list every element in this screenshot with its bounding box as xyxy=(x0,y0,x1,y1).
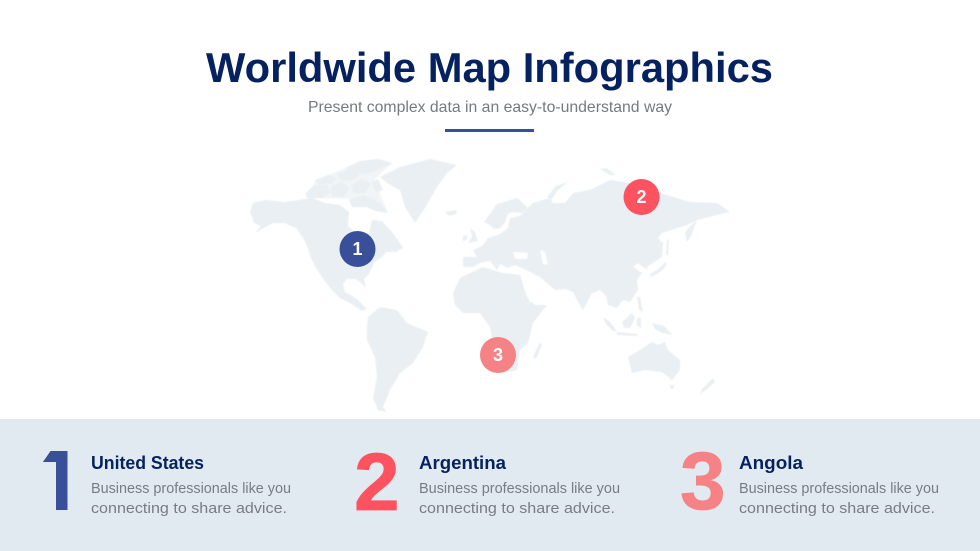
description xyxy=(739,480,939,517)
item 1: United States xyxy=(43,451,290,516)
heading: Angola: Angola xyxy=(739,453,804,473)
marker 1: United States xyxy=(340,231,376,267)
map: UK and Ireland xyxy=(468,228,478,243)
map: inland seas xyxy=(513,250,548,265)
map: Novaya Zemlya xyxy=(547,182,568,199)
description: Business professionals like you xyxy=(739,480,939,497)
description: connecting to share advice. xyxy=(739,500,935,517)
map: Australia xyxy=(628,342,680,380)
map: Red Sea xyxy=(521,277,533,303)
map: Arctic Russian islands xyxy=(600,168,616,175)
map: North America xyxy=(250,198,403,311)
marker 3: Angola xyxy=(480,337,516,373)
world map xyxy=(250,159,730,412)
subtitle: Present complex data in an easy-to-understand way xyxy=(308,99,672,116)
map: Scandinavia xyxy=(484,198,528,229)
title underline accent xyxy=(445,129,534,132)
map: Africa xyxy=(453,267,547,373)
map: Madagascar xyxy=(533,342,542,359)
big number 3: 3 xyxy=(680,436,726,527)
map: Japan and Sakhalin xyxy=(650,240,669,277)
map: Eurasia xyxy=(463,180,730,310)
description xyxy=(419,480,620,517)
description: Business professionals like you xyxy=(91,480,291,497)
map: Tasmania xyxy=(670,385,674,389)
description: connecting to share advice. xyxy=(419,500,615,517)
description xyxy=(91,480,291,517)
marker 1: United States: 1 xyxy=(352,239,363,259)
big number 1: 1 xyxy=(36,434,83,528)
heading: United States: United States xyxy=(91,453,204,473)
marker 2: Argentina: 2 xyxy=(636,187,647,207)
description: connecting to share advice. xyxy=(91,500,287,517)
item 3: Angola xyxy=(680,436,939,527)
map: New Zealand xyxy=(700,378,715,394)
description: Business professionals like you xyxy=(419,480,620,497)
item 2: Argentina xyxy=(354,437,620,528)
map: Greenland xyxy=(380,159,457,223)
map: South America xyxy=(367,307,428,412)
bottom panel xyxy=(0,419,980,551)
big number 2: 2 xyxy=(354,437,400,528)
map: Iceland xyxy=(445,210,457,216)
map: Arctic islands xyxy=(305,159,392,213)
map: Ireland xyxy=(463,235,467,241)
heading: Argentina: Argentina xyxy=(419,453,507,473)
map: Southeast Asian islands xyxy=(603,297,673,336)
title: Worldwide Map Infographics xyxy=(206,44,773,91)
marker 3: Angola: 3 xyxy=(493,345,503,365)
marker 2: Argentina xyxy=(624,179,660,215)
map: Kamchatka xyxy=(685,220,697,242)
